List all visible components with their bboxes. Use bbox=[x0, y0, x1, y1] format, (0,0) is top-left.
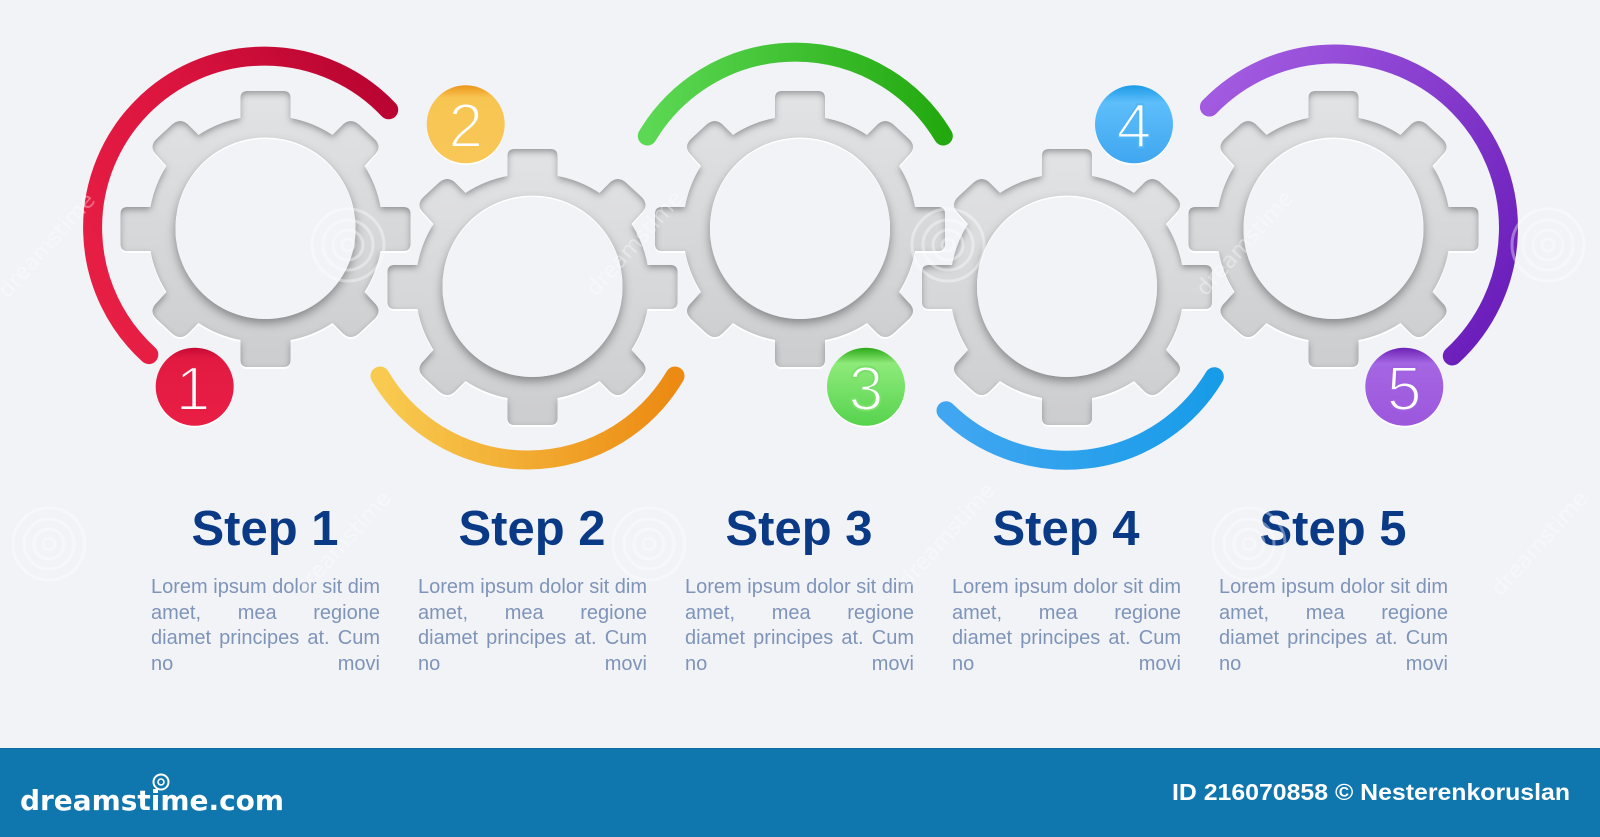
image id and credit: ID 216070858 © Nesterenkoruslan bbox=[1172, 779, 1570, 805]
badge 1: 1 bbox=[176, 355, 210, 424]
text block: step 3 description: amet, mea regione bbox=[685, 602, 914, 624]
text block: step 2 description: Lorem ipsum dolor sit dim bbox=[418, 576, 647, 598]
text block: step 3 description: no movi bbox=[685, 652, 914, 674]
text block: step 4 description: amet, mea regione bbox=[952, 602, 1181, 624]
arc 3: green bbox=[647, 52, 943, 136]
watermark overlay: dreamstime bbox=[1487, 486, 1594, 601]
text block: step 4 description: Lorem ipsum dolor sit dim bbox=[952, 576, 1181, 598]
arc 2: orange bbox=[380, 376, 675, 460]
badge 5: 5 bbox=[1387, 355, 1422, 424]
text block: step 1 description bbox=[151, 576, 380, 674]
heading: step 3: Step 3 bbox=[726, 502, 872, 556]
text block: step 5 description bbox=[1219, 576, 1448, 674]
text block: step 5 description: amet, mea regione bbox=[1219, 602, 1448, 624]
text block: step 1 description: no movi bbox=[151, 652, 380, 674]
text block: step 3 description bbox=[685, 576, 914, 674]
footer bar bbox=[0, 748, 1600, 837]
gear 5 bbox=[1188, 91, 1478, 369]
badge 5 bbox=[1365, 348, 1443, 428]
watermark overlay: dreamstime bbox=[582, 186, 689, 301]
heading: step 4: Step 4 bbox=[992, 502, 1140, 556]
text block: step 3 description: diamet principes at. Cum bbox=[685, 627, 914, 649]
heading: step 5: Step 5 bbox=[1260, 502, 1406, 556]
text block: step 2 description: diamet principes at. Cum bbox=[418, 627, 647, 649]
text block: step 1 description: Lorem ipsum dolor sit dim bbox=[151, 576, 380, 598]
text block: step 3 description: Lorem ipsum dolor sit dim bbox=[685, 576, 914, 598]
text block: step 2 description bbox=[418, 576, 647, 674]
watermark overlay: dreamstime bbox=[290, 486, 397, 601]
gear 2 bbox=[388, 149, 678, 427]
badge 4 bbox=[1095, 85, 1173, 165]
text block: step 4 description bbox=[952, 576, 1181, 674]
text block: step 5 description: no movi bbox=[1219, 652, 1448, 674]
text block: step 1 description: diamet principes at. Cum bbox=[151, 627, 380, 649]
watermark overlay: dreamstime bbox=[894, 478, 1001, 593]
text block: step 4 description: no movi bbox=[952, 652, 1181, 674]
arc 5: purple bbox=[1209, 54, 1508, 356]
arc 4: blue bbox=[946, 377, 1214, 460]
text block: step 4 description: diamet principes at. Cum bbox=[952, 627, 1181, 649]
badge 3 bbox=[827, 348, 905, 428]
heading: step 2: Step 2 bbox=[458, 502, 606, 556]
gear 4 bbox=[922, 149, 1212, 427]
badge 2 bbox=[427, 85, 505, 165]
gear 3 bbox=[655, 91, 945, 369]
badge 4: 4 bbox=[1117, 92, 1151, 161]
text block: step 1 description: amet, mea regione bbox=[151, 602, 380, 624]
logo: dreamstime.com: dreamstime.com bbox=[20, 784, 284, 817]
badge 3: 3 bbox=[849, 355, 883, 424]
text block: step 5 description: Lorem ipsum dolor sit dim bbox=[1219, 576, 1448, 598]
arc 1: red bbox=[93, 56, 389, 355]
text block: step 2 description: amet, mea regione bbox=[418, 602, 647, 624]
heading: step 1: Step 1 bbox=[192, 502, 338, 556]
badge 1 bbox=[156, 348, 234, 428]
watermark overlay: dreamstime bbox=[1192, 186, 1299, 301]
gear 1 bbox=[120, 91, 410, 369]
text block: step 2 description: no movi bbox=[418, 652, 647, 674]
badge 2: 2 bbox=[448, 92, 483, 161]
text block: step 5 description: diamet principes at. Cum bbox=[1219, 627, 1448, 649]
